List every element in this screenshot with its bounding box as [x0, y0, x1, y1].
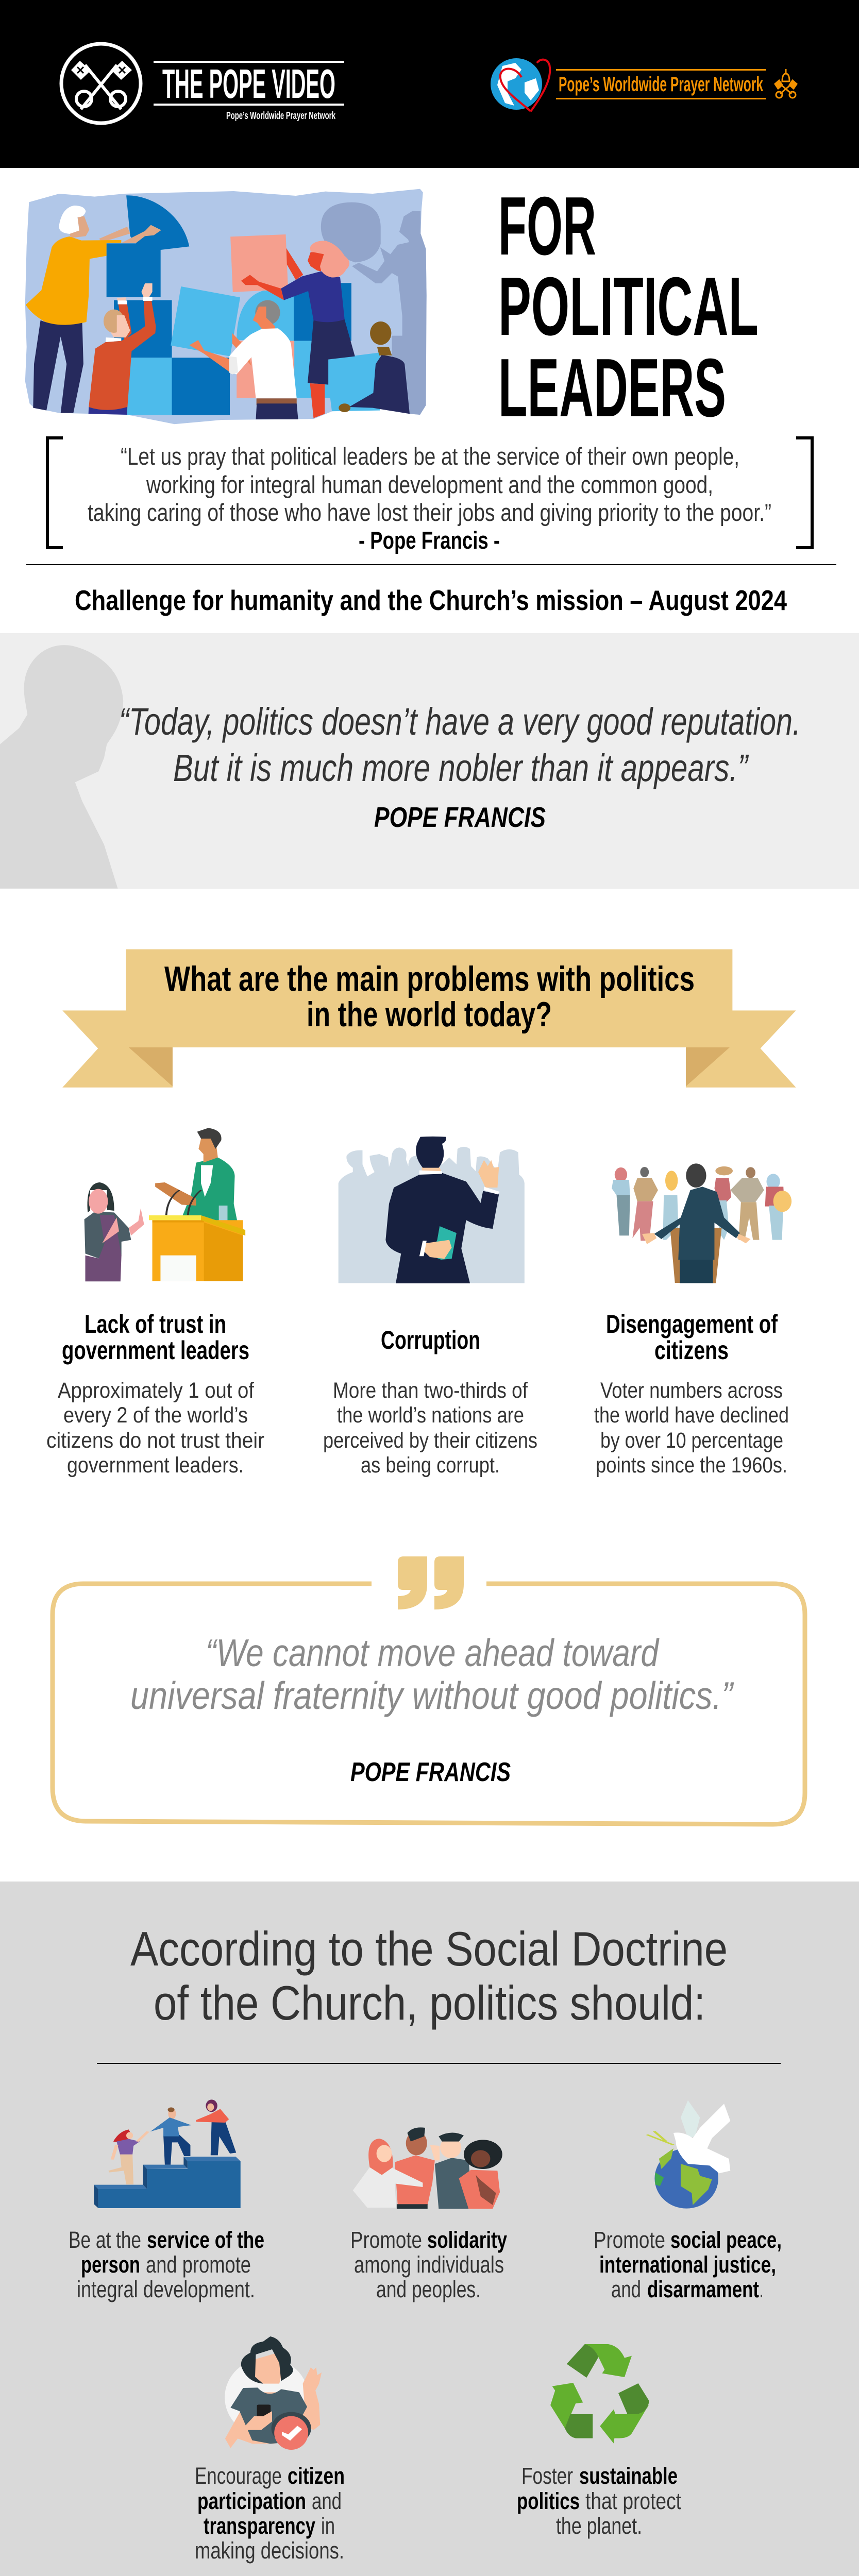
item: solidarity: solidarity — [427, 2227, 507, 2253]
illustration: people building a puzzle — [25, 189, 427, 424]
silhouette: Pope Francis — [0, 645, 123, 889]
ribbon heading — [62, 949, 796, 1088]
item: social peace: international justice, — [599, 2251, 776, 2278]
illustration: leader facing turned-away citizens — [612, 1163, 791, 1283]
prayer quote with brackets: “Let us pray that political leaders be at the service of their own people, — [121, 443, 739, 470]
item: sustainable politics: sustainable — [579, 2463, 678, 2489]
illustration: corrupt politician with money behind back — [339, 1137, 525, 1283]
prayer quote with brackets: working for integral human development and the common good, — [146, 471, 713, 498]
item: citizen participation: and — [312, 2488, 342, 2514]
item: social peace: social peace, — [670, 2227, 782, 2253]
callout: framed quote: “We cannot move ahead toward — [206, 1631, 660, 1674]
problem: corruption: perceived by their citizens — [323, 1428, 537, 1453]
logo: The Pope Video wordmark — [154, 61, 344, 122]
problem: disengagement: Disengagement of — [606, 1310, 778, 1338]
problem: lack of trust: Lack of trust in — [85, 1310, 226, 1338]
item: service of the person: integral development. — [77, 2276, 255, 2302]
item: citizen participation: citizen — [288, 2463, 345, 2489]
problem: lack of trust: government leaders. — [67, 1453, 244, 1478]
logo: globe and heart — [491, 58, 550, 111]
item: service of the person: and promote — [146, 2251, 251, 2278]
panel: header bar — [0, 0, 859, 168]
logo: The Pope Video wordmark: THE POPE VIDEO — [162, 61, 335, 107]
problem: disengagement: citizens — [654, 1336, 729, 1365]
item: service of the person: Be at the — [69, 2227, 141, 2253]
logo: Pope's Worldwide Prayer Network wordmark — [556, 69, 766, 99]
item: citizen participation: making decisions. — [195, 2537, 344, 2564]
problem: corruption — [323, 1326, 537, 1478]
title — [498, 180, 759, 434]
item: citizen participation: transparency — [204, 2513, 315, 2539]
callout: framed quote: universal fraternity without good politics.” — [130, 1674, 734, 1717]
logo: The Pope Video wordmark: Pope’s Worldwide Prayer Network — [226, 110, 336, 122]
ribbon heading: What are the main problems with politics — [164, 959, 695, 998]
heading: of the Church, politics should: — [154, 1976, 705, 2030]
prayer quote with brackets — [47, 438, 812, 554]
item: solidarity: among individuals — [354, 2251, 504, 2278]
item: service of the person — [69, 2227, 264, 2302]
problem: corruption: as being corrupt. — [361, 1453, 500, 1478]
callout: framed quote: POPE FRANCIS — [350, 1757, 511, 1787]
item: social peace: Promote — [594, 2227, 665, 2253]
item: citizen participation: in — [321, 2513, 335, 2539]
item: service of the person: person — [81, 2251, 140, 2278]
logo: The Pope Video keys emblem — [61, 44, 141, 123]
problem: lack of trust: citizens do not trust their — [46, 1428, 264, 1453]
problem: disengagement — [594, 1310, 789, 1478]
quote text — [119, 700, 801, 833]
problem: corruption: More than two-thirds of — [333, 1378, 528, 1403]
item: sustainable politics: Foster — [521, 2463, 573, 2489]
title: FOR — [498, 180, 596, 273]
item: citizen participation: participation — [197, 2488, 306, 2514]
illustration: woman with phone and check badge — [225, 2336, 322, 2450]
problem: disengagement: by over 10 percentage — [600, 1428, 783, 1453]
item: social peace — [594, 2227, 782, 2302]
prayer quote with brackets: - Pope Francis - — [359, 527, 500, 554]
problem: disengagement: Voter numbers across — [600, 1378, 783, 1403]
illustration: people helping each other climb steps — [94, 2099, 241, 2208]
illustration: recycling symbol — [550, 2344, 649, 2444]
illustration: group of diverse friends — [353, 2127, 502, 2209]
problem: corruption: Corruption — [381, 1326, 480, 1354]
quote text: POPE FRANCIS — [374, 801, 546, 833]
problem: disengagement: the world have declined — [594, 1403, 789, 1428]
icon: quotation marks — [398, 1556, 464, 1609]
problem: lack of trust — [46, 1310, 264, 1478]
callout: framed quote — [53, 1556, 805, 1824]
problem: lack of trust: every 2 of the world’s — [63, 1403, 248, 1428]
item: citizen participation — [195, 2463, 345, 2564]
panel: Social Doctrine section — [0, 1882, 859, 2576]
item: sustainable politics — [517, 2463, 681, 2539]
item: citizen participation: Encourage — [195, 2463, 282, 2489]
item: social peace: disarmament — [647, 2276, 759, 2302]
item: social peace: . — [760, 2276, 763, 2302]
item: sustainable politics: politics — [517, 2488, 580, 2514]
heading: According to the Social Doctrine — [130, 1922, 728, 1976]
panel: grey quote band — [0, 633, 859, 889]
item: service of the person: service of the — [147, 2227, 264, 2253]
ribbon heading: in the world today? — [307, 995, 552, 1034]
item: solidarity: and peoples. — [376, 2276, 481, 2302]
problem: corruption: the world’s nations are — [337, 1403, 524, 1428]
item: social peace: and — [611, 2276, 641, 2302]
illustration: speaker at a podium and distrustful woman — [85, 1128, 245, 1281]
problem: lack of trust: government leaders — [62, 1336, 249, 1365]
icon: papal keys and tiara — [775, 69, 797, 98]
item: sustainable politics: the planet. — [556, 2513, 642, 2539]
item: solidarity — [350, 2227, 507, 2302]
illustration: dove of peace over the globe — [647, 2100, 730, 2209]
problem: lack of trust: Approximately 1 out of — [58, 1378, 255, 1403]
heading — [130, 1922, 728, 2030]
item: sustainable politics: that protect — [585, 2488, 681, 2514]
item: solidarity: Promote — [350, 2227, 422, 2253]
problem: disengagement: points since the 1960s. — [596, 1453, 787, 1478]
